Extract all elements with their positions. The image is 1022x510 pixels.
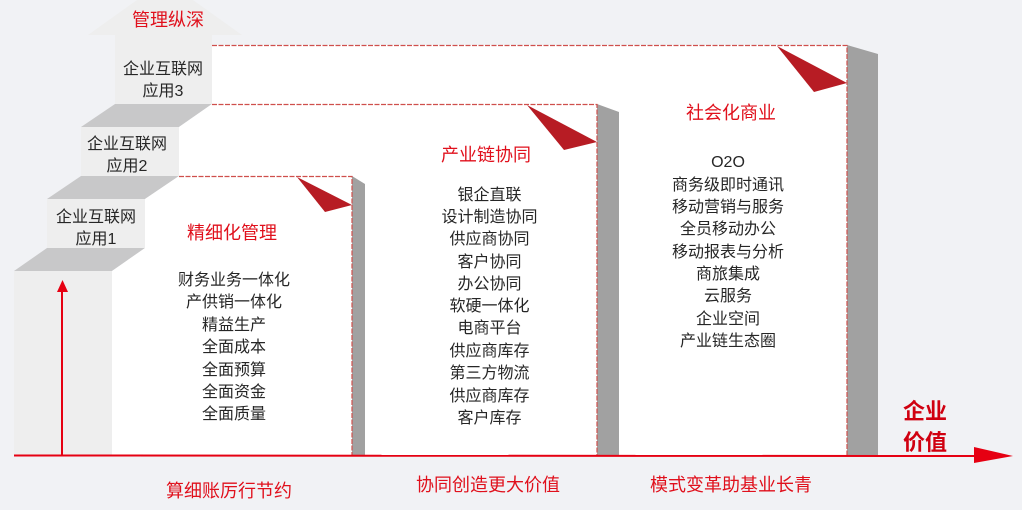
side shadow [352,176,365,455]
heading: 社会化商业 [686,103,776,123]
item list [178,271,290,423]
heading: 精细化管理 [187,223,277,243]
folded corner [527,105,597,150]
item list: 电商平台 [457,319,522,337]
step tread 2 [47,176,179,199]
side shadow [847,45,878,455]
folded corner [297,177,352,212]
item list: 产业链生态圈 [680,332,776,350]
arrow: vertical depth axis [57,280,68,455]
item list: 全员移动办公 [680,220,776,238]
item list: 办公协同 [457,275,522,293]
step label 3: 企业互联网 [123,61,203,78]
staircase: enterprise internet application steps [14,0,242,455]
dashed outline [212,104,597,455]
dashed outline [179,176,352,455]
item list: 供应商协同 [449,229,530,248]
step label 1: 应用1 [76,229,117,248]
item list: 产供销一体化 [186,293,282,311]
axis label: enterprise value: 企业 [903,399,947,424]
arrow head: management depth [88,0,242,35]
item list: 商旅集成 [696,265,760,283]
heading: management depth: 管理纵深 [132,10,204,30]
caption: collaborative value: 协同创造更大价值 [416,475,560,495]
item list [441,186,538,427]
item list: 软硬一体化 [449,297,530,315]
white backdrop behind all three panels [112,45,847,455]
item list [672,154,784,350]
panel: industry chain collaboration [212,104,619,455]
item list: 客户协同 [457,253,522,271]
item list: 云服务 [704,287,752,305]
item list: 全面成本 [202,338,266,356]
step column 2 [81,127,179,176]
side shadow [597,104,619,455]
caption: model change: 模式变革助基业长青 [650,475,812,495]
item list: 供应商库存 [449,386,530,405]
item list: 商务级即时通讯 [672,176,784,194]
item list: 财务业务一体化 [178,271,290,289]
axis label: enterprise value: 价值 [903,430,947,455]
step label 1: 企业互联网 [56,209,136,226]
step tread 1 [14,248,145,271]
item list: 移动营销与服务 [672,198,784,216]
step label 2: 应用2 [107,156,148,175]
item list: 第三方物流 [449,364,530,382]
item list: 供应商库存 [449,341,530,360]
panel: social commerce [212,45,878,455]
panel: refined management [178,176,365,455]
item list: 企业空间 [696,310,760,328]
arrow: enterprise value axis [14,447,1013,463]
item list: 全面预算 [202,360,266,379]
step column 1 [47,199,145,248]
item list: 全面资金 [202,383,266,401]
caption: refined accounting: 算细账厉行节约 [166,481,292,501]
item list: O2O [711,154,745,171]
step column 3 [115,35,212,104]
step tread 3 [81,104,212,127]
step label 2: 企业互联网 [87,136,167,153]
folded corner [777,46,847,92]
dashed outline [212,46,847,455]
heading: 产业链协同 [441,145,531,165]
item list: 银企直联 [457,186,522,204]
base column [14,271,112,455]
step label 3: 应用3 [143,81,184,100]
item list: 移动报表与分析 [672,243,784,261]
item list: 全面质量 [202,405,266,423]
item list: 精益生产 [202,316,266,334]
item list: 设计制造协同 [441,208,538,226]
item list: 客户库存 [457,409,522,427]
